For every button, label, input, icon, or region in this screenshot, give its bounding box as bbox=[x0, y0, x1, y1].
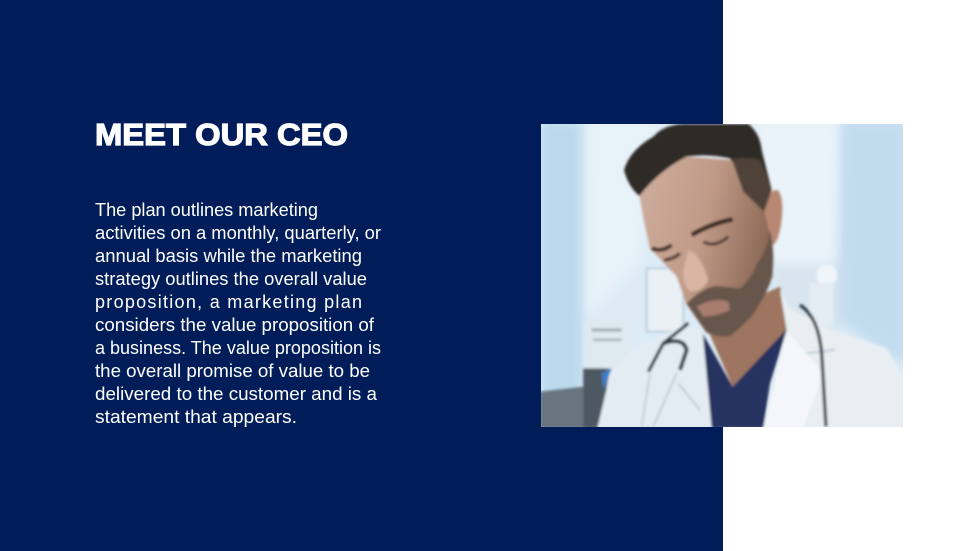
body text: proposition, a marketing plan bbox=[95, 292, 362, 312]
body text: a business. The value proposition is bbox=[95, 338, 381, 358]
title: MEET OUR CEO bbox=[95, 117, 348, 152]
scrubs bbox=[703, 328, 787, 428]
body text: annual basis while the marketing bbox=[95, 246, 362, 266]
ear bbox=[763, 190, 782, 246]
body text: strategy outlines the overall value bbox=[95, 269, 367, 289]
hair bbox=[622, 124, 772, 197]
body text: considers the value proposition of bbox=[95, 315, 375, 335]
coat left bbox=[597, 323, 712, 428]
panel: navy background bbox=[0, 0, 723, 551]
brows and eyes bbox=[692, 219, 733, 235]
body text: statement that appears. bbox=[95, 407, 297, 427]
nose bbox=[683, 250, 708, 292]
sign and door in background bbox=[582, 321, 612, 370]
body text: the overall promise of value to be bbox=[95, 361, 370, 381]
photo: doctor portrait illustration bbox=[540, 120, 907, 428]
body text: The plan outlines marketing bbox=[95, 200, 318, 220]
body text: activities on a monthly, quarterly, or bbox=[95, 223, 381, 243]
body text: delivered to the customer and is a bbox=[95, 384, 378, 404]
beard bbox=[687, 230, 773, 337]
body text bbox=[95, 200, 381, 427]
stethoscope bbox=[648, 323, 688, 372]
face bbox=[639, 157, 773, 335]
coat right bbox=[778, 290, 903, 427]
neck bbox=[703, 287, 788, 387]
